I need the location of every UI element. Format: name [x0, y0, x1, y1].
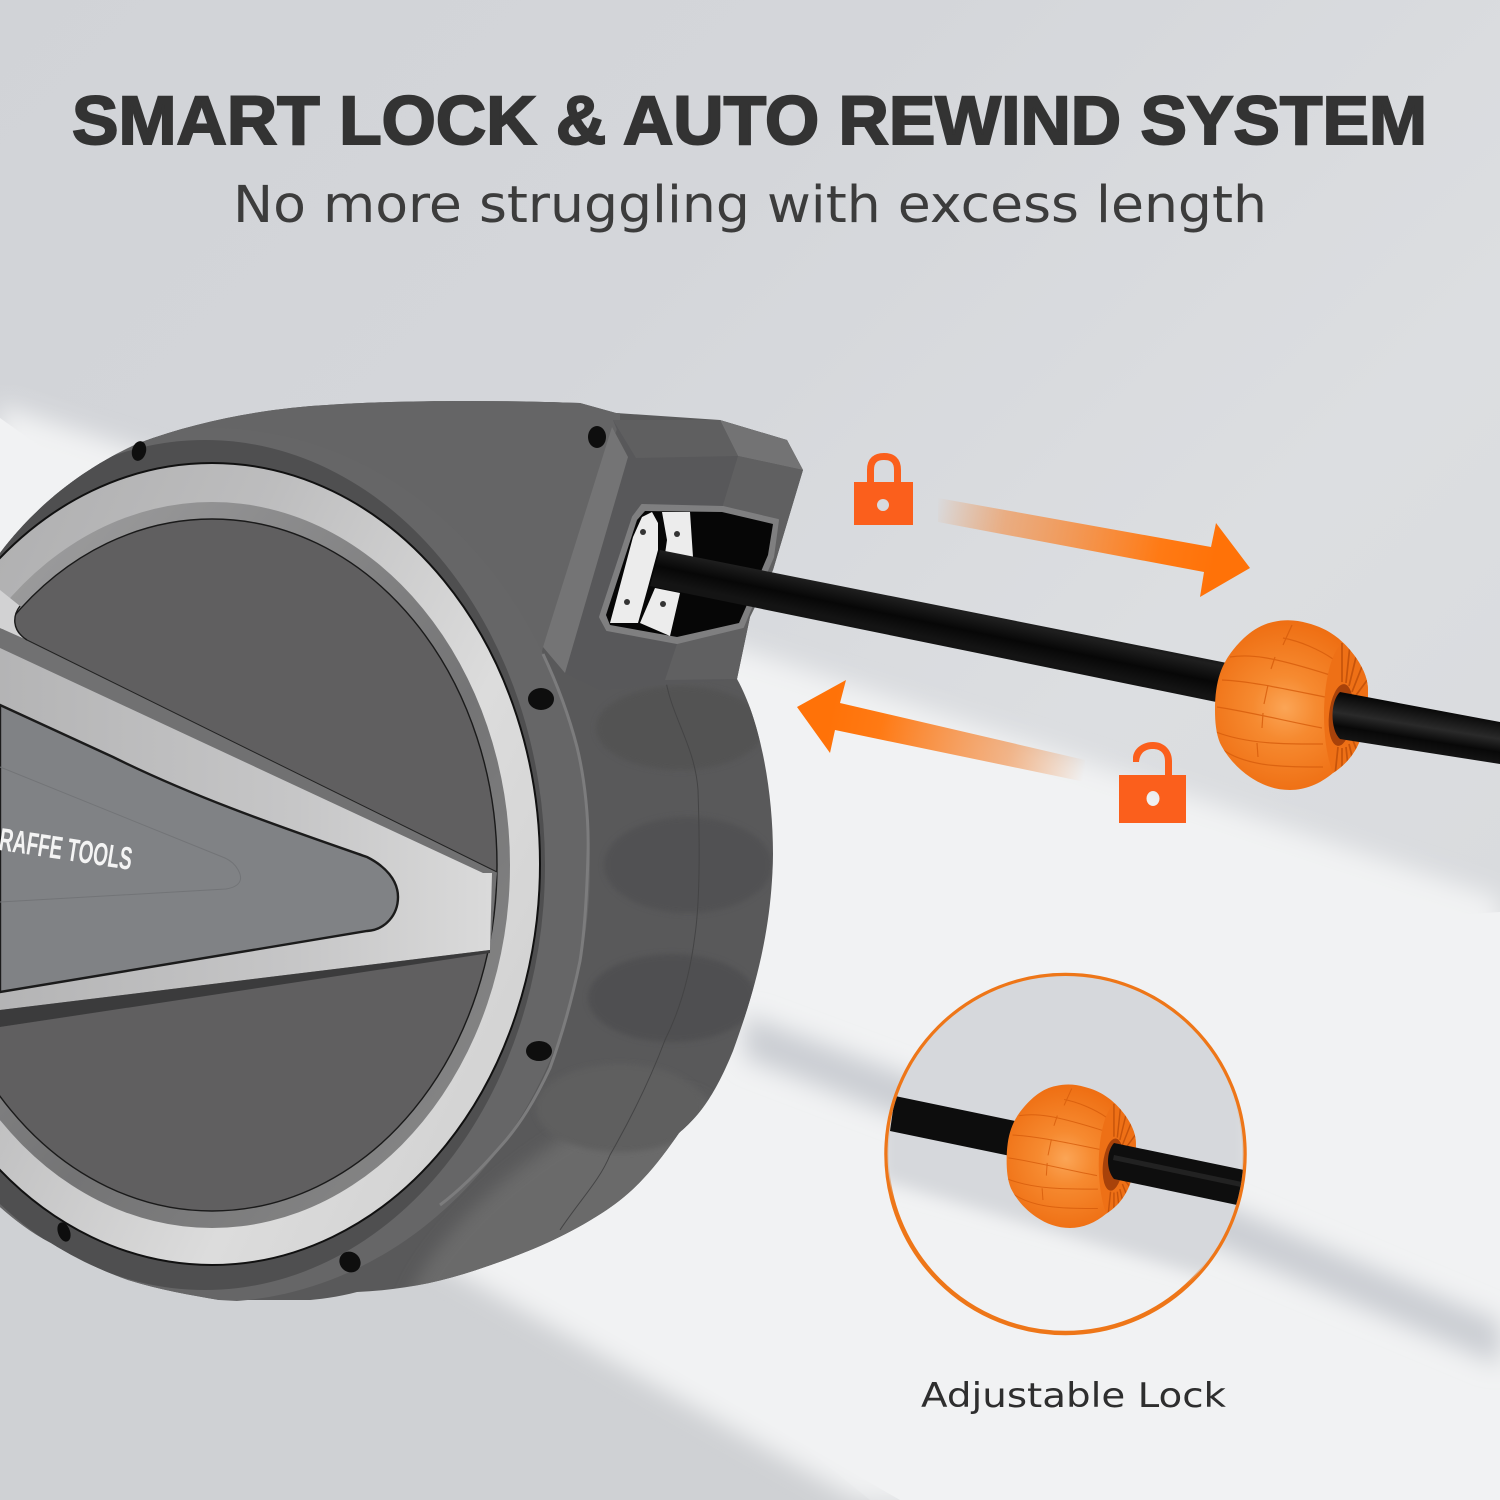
housing side lobes: [560, 684, 773, 1230]
unlocked padlock icon: [1119, 742, 1186, 823]
adjustable lock callout circle: [880, 960, 1250, 1333]
locked padlock icon: [854, 456, 913, 525]
title: SMART LOCK & AUTO REWIND SYSTEM: [72, 82, 1427, 159]
white roller guides: [610, 512, 693, 636]
cable outlet box: [614, 420, 803, 684]
reel housing body: [0, 401, 803, 1301]
dark ring band: [0, 440, 545, 1290]
silver ring: [0, 463, 540, 1265]
arrow: rewind, unlocked: [797, 680, 1085, 782]
dark face panel: [0, 519, 497, 1211]
spoke assembly: [0, 590, 497, 1027]
orange stopper ball on hose: [1215, 620, 1500, 790]
arrow: pull out, locks: [938, 498, 1250, 597]
subtitle: No more struggling with excess length: [233, 175, 1267, 234]
grey centre triangle: [0, 705, 398, 992]
screw holes: [55, 426, 606, 1277]
hose: [650, 550, 1232, 704]
callout caption: Adjustable Lock: [921, 1376, 1226, 1416]
silver spoke: [0, 648, 492, 1010]
ring inner lip: [0, 502, 510, 1228]
top plate: [0, 401, 620, 652]
hose reel product: [0, 401, 803, 1301]
brand label: RAFFE TOOLS: [0, 821, 135, 877]
cable opening: [600, 505, 778, 643]
